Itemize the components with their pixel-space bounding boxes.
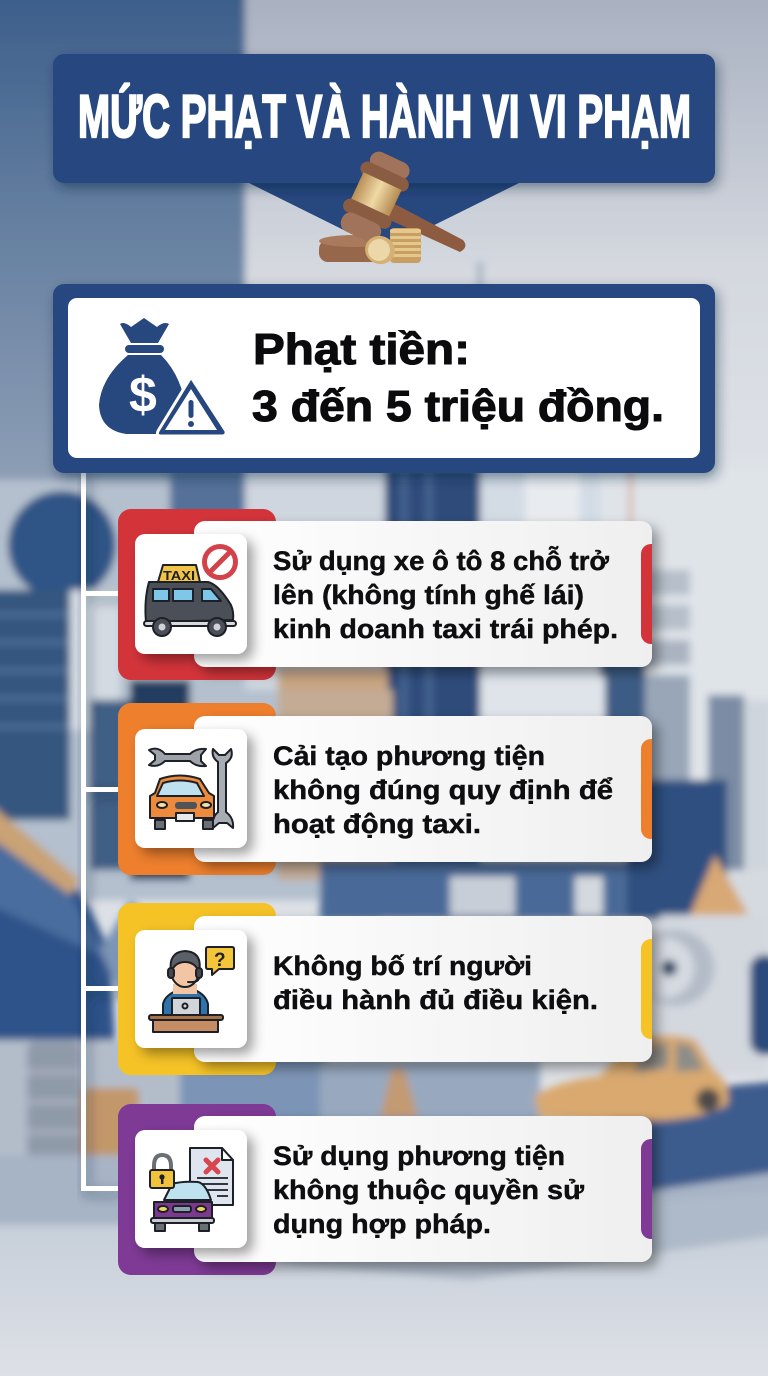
description: điều hành đủ điều kiện. — [273, 985, 598, 1015]
icon: money bag with warning: $ — [129, 367, 157, 423]
description: hoạt động taxi. — [273, 809, 481, 839]
icon tile: operator with headset — [135, 930, 247, 1048]
description — [273, 741, 613, 839]
description — [273, 951, 598, 1015]
violation 2: improper modification — [118, 703, 681, 875]
description: không thuộc quyền sử — [273, 1175, 584, 1205]
banner panel — [53, 54, 715, 183]
text card — [194, 521, 652, 667]
icon tile: taxi: TAXI — [163, 569, 195, 583]
yellow backing block — [118, 903, 276, 1075]
icon: gavel and coins — [319, 147, 465, 268]
panel white card — [68, 298, 700, 458]
fine amount text: 3 đến 5 triệu đồng. — [252, 382, 664, 431]
fine heading: Phạt tiền: — [253, 325, 470, 374]
banner pointer — [249, 178, 519, 250]
description: dụng hợp pháp. — [273, 1209, 491, 1239]
accent tab — [641, 1139, 652, 1239]
red backing block — [118, 509, 276, 680]
purple backing block — [118, 1104, 276, 1275]
violation 3: unqualified operator — [118, 903, 681, 1075]
icon tile: locked car and rejected document — [135, 1130, 247, 1248]
description — [273, 1141, 584, 1239]
text card — [194, 716, 652, 862]
description: Sử dụng phương tiện — [273, 1141, 565, 1171]
panel: fine amount — [53, 284, 715, 473]
description: kinh doanh taxi trái phép. — [273, 614, 618, 644]
accent tab — [641, 939, 652, 1039]
text card — [194, 916, 652, 1062]
connector lines linking fine panel to each violation — [81, 470, 119, 1191]
text card — [194, 1116, 652, 1262]
icon tile: operator with headset: ? — [214, 950, 226, 971]
violation 4: unlawful vehicle use — [118, 1104, 681, 1275]
violation 1: illegal taxi — [118, 509, 681, 680]
description: không đúng quy định để — [273, 775, 613, 805]
icon tile: car and wrenches — [135, 729, 247, 848]
description: Cải tạo phương tiện — [273, 741, 545, 771]
description: Không bố trí người — [273, 951, 532, 981]
orange backing block — [118, 703, 276, 875]
description — [273, 545, 618, 644]
description: lên (không tính ghế lái) — [273, 580, 584, 610]
accent tab — [641, 739, 652, 839]
accent tab — [641, 544, 652, 644]
icon: money bag with warning — [99, 318, 226, 436]
description: Sử dụng xe ô tô 8 chỗ trở — [273, 545, 610, 576]
header banner — [53, 54, 715, 250]
icon tile: taxi — [135, 534, 247, 654]
panel frame — [53, 284, 715, 473]
